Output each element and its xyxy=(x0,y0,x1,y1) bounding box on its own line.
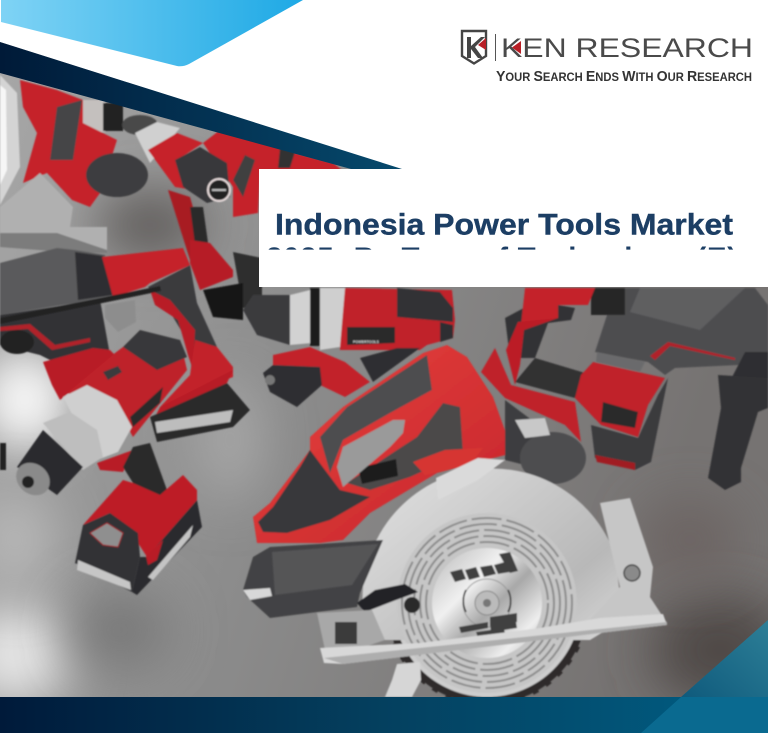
saw blade disc xyxy=(393,509,581,697)
saw blade guard xyxy=(362,468,623,640)
saw base plate xyxy=(320,614,667,664)
saw handle body xyxy=(253,345,513,543)
saw lever xyxy=(357,584,418,612)
logo wordmark: KEN RESEARCH xyxy=(501,33,753,63)
title line 1: Indonesia Power Tools Market xyxy=(275,208,733,242)
logo K accent xyxy=(512,41,521,54)
logo: Ken Research xyxy=(462,31,753,85)
tool: top drill with dial xyxy=(122,115,342,320)
tool: right hammer drill xyxy=(481,288,768,490)
saw base left xyxy=(317,610,385,652)
tool: front-left drill xyxy=(0,330,250,595)
saw lower stem xyxy=(385,662,421,697)
tool: left hammer drill xyxy=(0,248,233,407)
title line 2, clipped: 2025: By Type of Technology (E) xyxy=(266,242,737,275)
teal corner shape xyxy=(681,620,768,697)
saw blade teeth xyxy=(386,502,588,704)
blade logo marks xyxy=(450,552,518,638)
tool: front circular saw xyxy=(243,345,667,704)
saw blade inner disc xyxy=(397,513,577,693)
teal corner on bar xyxy=(641,697,768,733)
logo tagline: YOUR SEARCH ENDS WITH OUR RESEARCH xyxy=(496,69,752,85)
title panel xyxy=(259,169,768,287)
saw motor nose xyxy=(243,540,383,618)
white header background xyxy=(0,0,768,169)
cyan corner shape xyxy=(1,0,303,66)
powertools label: POWERTOOLS xyxy=(353,340,379,344)
bottom bar xyxy=(0,697,768,733)
navy diagonal band xyxy=(0,42,402,169)
tool: top-left circular saw xyxy=(0,75,148,253)
guard highlight xyxy=(436,458,505,500)
saw bracket right xyxy=(583,498,667,627)
logo divider xyxy=(495,34,496,61)
tool: center drill and impact driver xyxy=(243,288,455,407)
logo icon: shield xyxy=(462,31,486,64)
